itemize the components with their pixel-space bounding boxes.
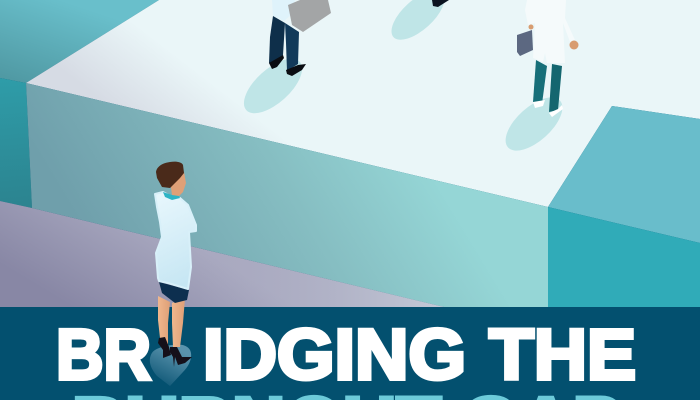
hand [570,40,578,50]
skirt [159,282,189,303]
doctor, middle, mostly cropped [383,0,453,48]
shoes [269,55,284,69]
upper left block top [0,0,159,83]
title line 1: THE [489,316,636,395]
coat hem [272,0,295,21]
heart-shaped location pin [150,345,191,386]
holding hand [528,24,534,30]
title line 1: IDGING [203,316,466,395]
shadow [235,49,311,123]
title line 1: BR [56,316,151,395]
woman doctor [155,162,196,367]
legs [158,296,170,345]
central platform front face [26,83,548,308]
left block front face [0,78,32,208]
shadow [383,0,453,48]
central platform top surface [26,0,700,207]
right block top [548,106,700,243]
legs [533,60,547,104]
gap floor [0,201,448,308]
doctor with green trousers, right [497,0,578,160]
shoe [432,0,449,7]
background scene [0,0,700,308]
collar [163,192,180,200]
shoes [533,100,545,108]
hair [156,162,184,188]
title banner [0,307,700,400]
neck and face [170,172,186,196]
briefcase [288,0,331,32]
shoes [158,337,171,358]
doctor with briefcase, left [235,0,331,123]
shadow [497,88,571,160]
legs [269,16,285,68]
gap floor highlight [0,201,448,308]
briefcase [517,30,533,56]
title line 1 [56,316,636,395]
right block front [548,207,700,308]
coat [155,192,196,289]
coat [525,0,575,63]
